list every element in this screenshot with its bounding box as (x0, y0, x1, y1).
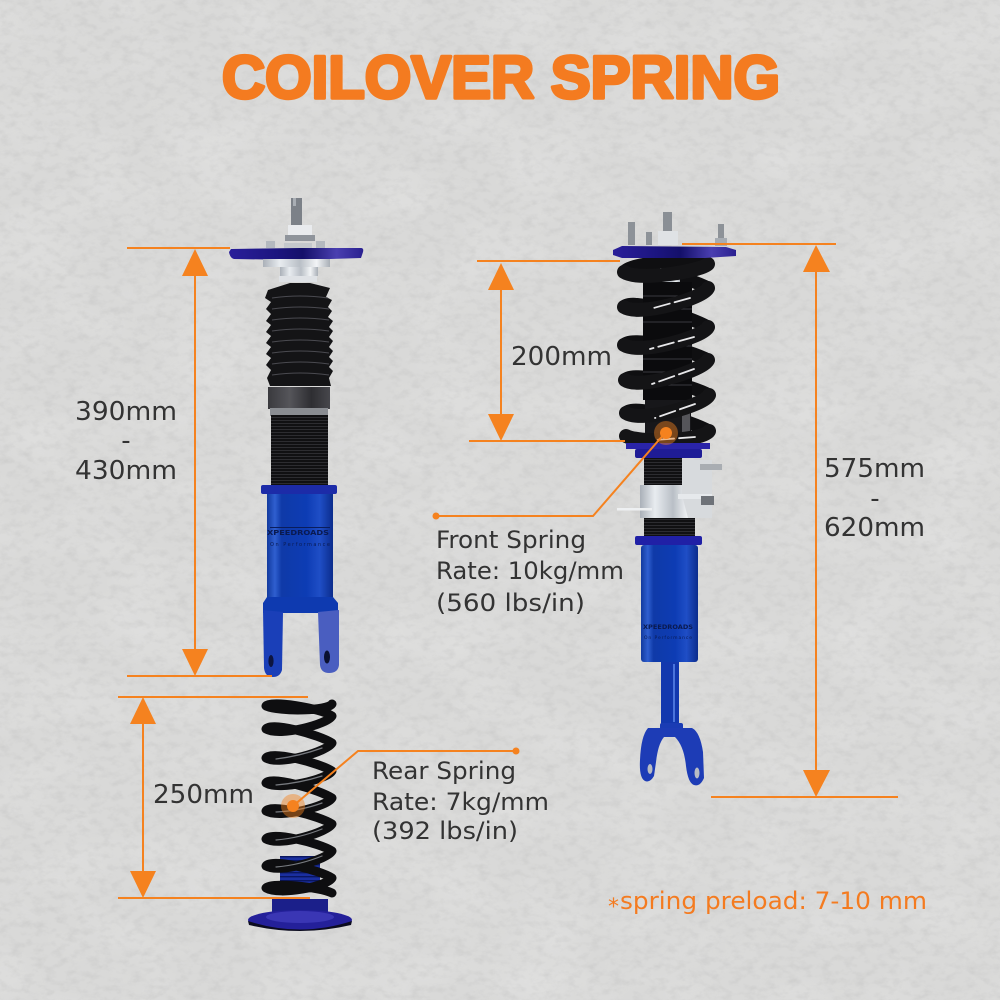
icon: top studs (628, 212, 727, 246)
callout: rear spring rate (281, 748, 549, 845)
callout: front spring rate (432, 421, 678, 617)
dimension: front spring 200mm: 200mm (511, 342, 612, 372)
icon: black bellows (265, 283, 333, 386)
icon: top mount plate (229, 248, 363, 260)
dimension: rear strut 390-430mm: 430mm (75, 456, 177, 486)
icon: top stud and nut (266, 198, 325, 248)
icon: mounting bracket (617, 460, 722, 518)
dimension: rear spring 250mm: 250mm (153, 780, 254, 810)
icon: under plate hardware (263, 259, 330, 282)
callout: rear spring rate: (392 lbs/in) (372, 817, 518, 845)
icon: threaded section (271, 415, 328, 485)
title: COILOVER SPRING (222, 44, 780, 111)
icon: dark collar (268, 387, 330, 416)
rear spring photo (248, 704, 352, 931)
dimension: front strut 575-620mm: 620mm (824, 513, 925, 543)
icon: blue lock ring (261, 485, 337, 494)
dimension: front strut 575-620mm: - (870, 484, 880, 514)
callout: rear spring rate: Rate: 7kg/mm (372, 788, 549, 816)
icon: blue body: On Performance (644, 635, 692, 641)
icon: blue body (263, 494, 338, 613)
icon: lower threaded section (644, 518, 695, 537)
icon: spring seat threaded sleeve (280, 856, 320, 892)
dimension: front spring 200mm (469, 261, 625, 441)
icon: spring seat (626, 443, 710, 458)
icon: spring seat flange (248, 899, 352, 931)
callout: front spring rate: Front Spring (436, 526, 586, 554)
icon: lower rod (660, 662, 683, 730)
icon: front coil rear strands (624, 261, 709, 431)
dimension: rear strut 390-430mm: - (121, 426, 131, 456)
icon: rear coil (266, 704, 332, 893)
icon: blue body: On Performance (270, 542, 330, 548)
callout: front spring rate: Rate: 10kg/mm (436, 557, 624, 585)
icon: upper threaded section (644, 458, 682, 486)
icon: right fork (318, 610, 339, 673)
rear strut photo (229, 198, 363, 677)
icon: front coil front strands (624, 264, 709, 440)
dimension: front strut 575-620mm (682, 244, 925, 797)
dimension: rear strut 390-430mm: 390mm (75, 397, 177, 427)
footnote: spring preload: * (608, 895, 619, 920)
callout: rear spring rate: Rear Spring (372, 757, 516, 785)
icon: blue body: XPEEDROADS (267, 529, 329, 537)
icon: top mount plate (613, 246, 736, 258)
front strut photo (613, 212, 736, 785)
icon: inner bellows (643, 268, 692, 434)
icon: silver sleeve (640, 485, 700, 518)
icon: blue lock ring (635, 536, 702, 545)
icon: blue body: XPEEDROADS (643, 623, 693, 631)
icon: lower fork (640, 728, 704, 785)
dimension: rear strut 390-430mm (75, 248, 272, 676)
callout: front spring rate: (560 lbs/in) (436, 589, 585, 617)
icon: blue body (641, 545, 698, 662)
footnote: spring preload: spring preload: 7-10 mm (620, 887, 927, 915)
icon: left fork (263, 610, 283, 677)
dimension: front strut 575-620mm: 575mm (824, 454, 925, 484)
dimension: rear spring 250mm (118, 697, 310, 898)
